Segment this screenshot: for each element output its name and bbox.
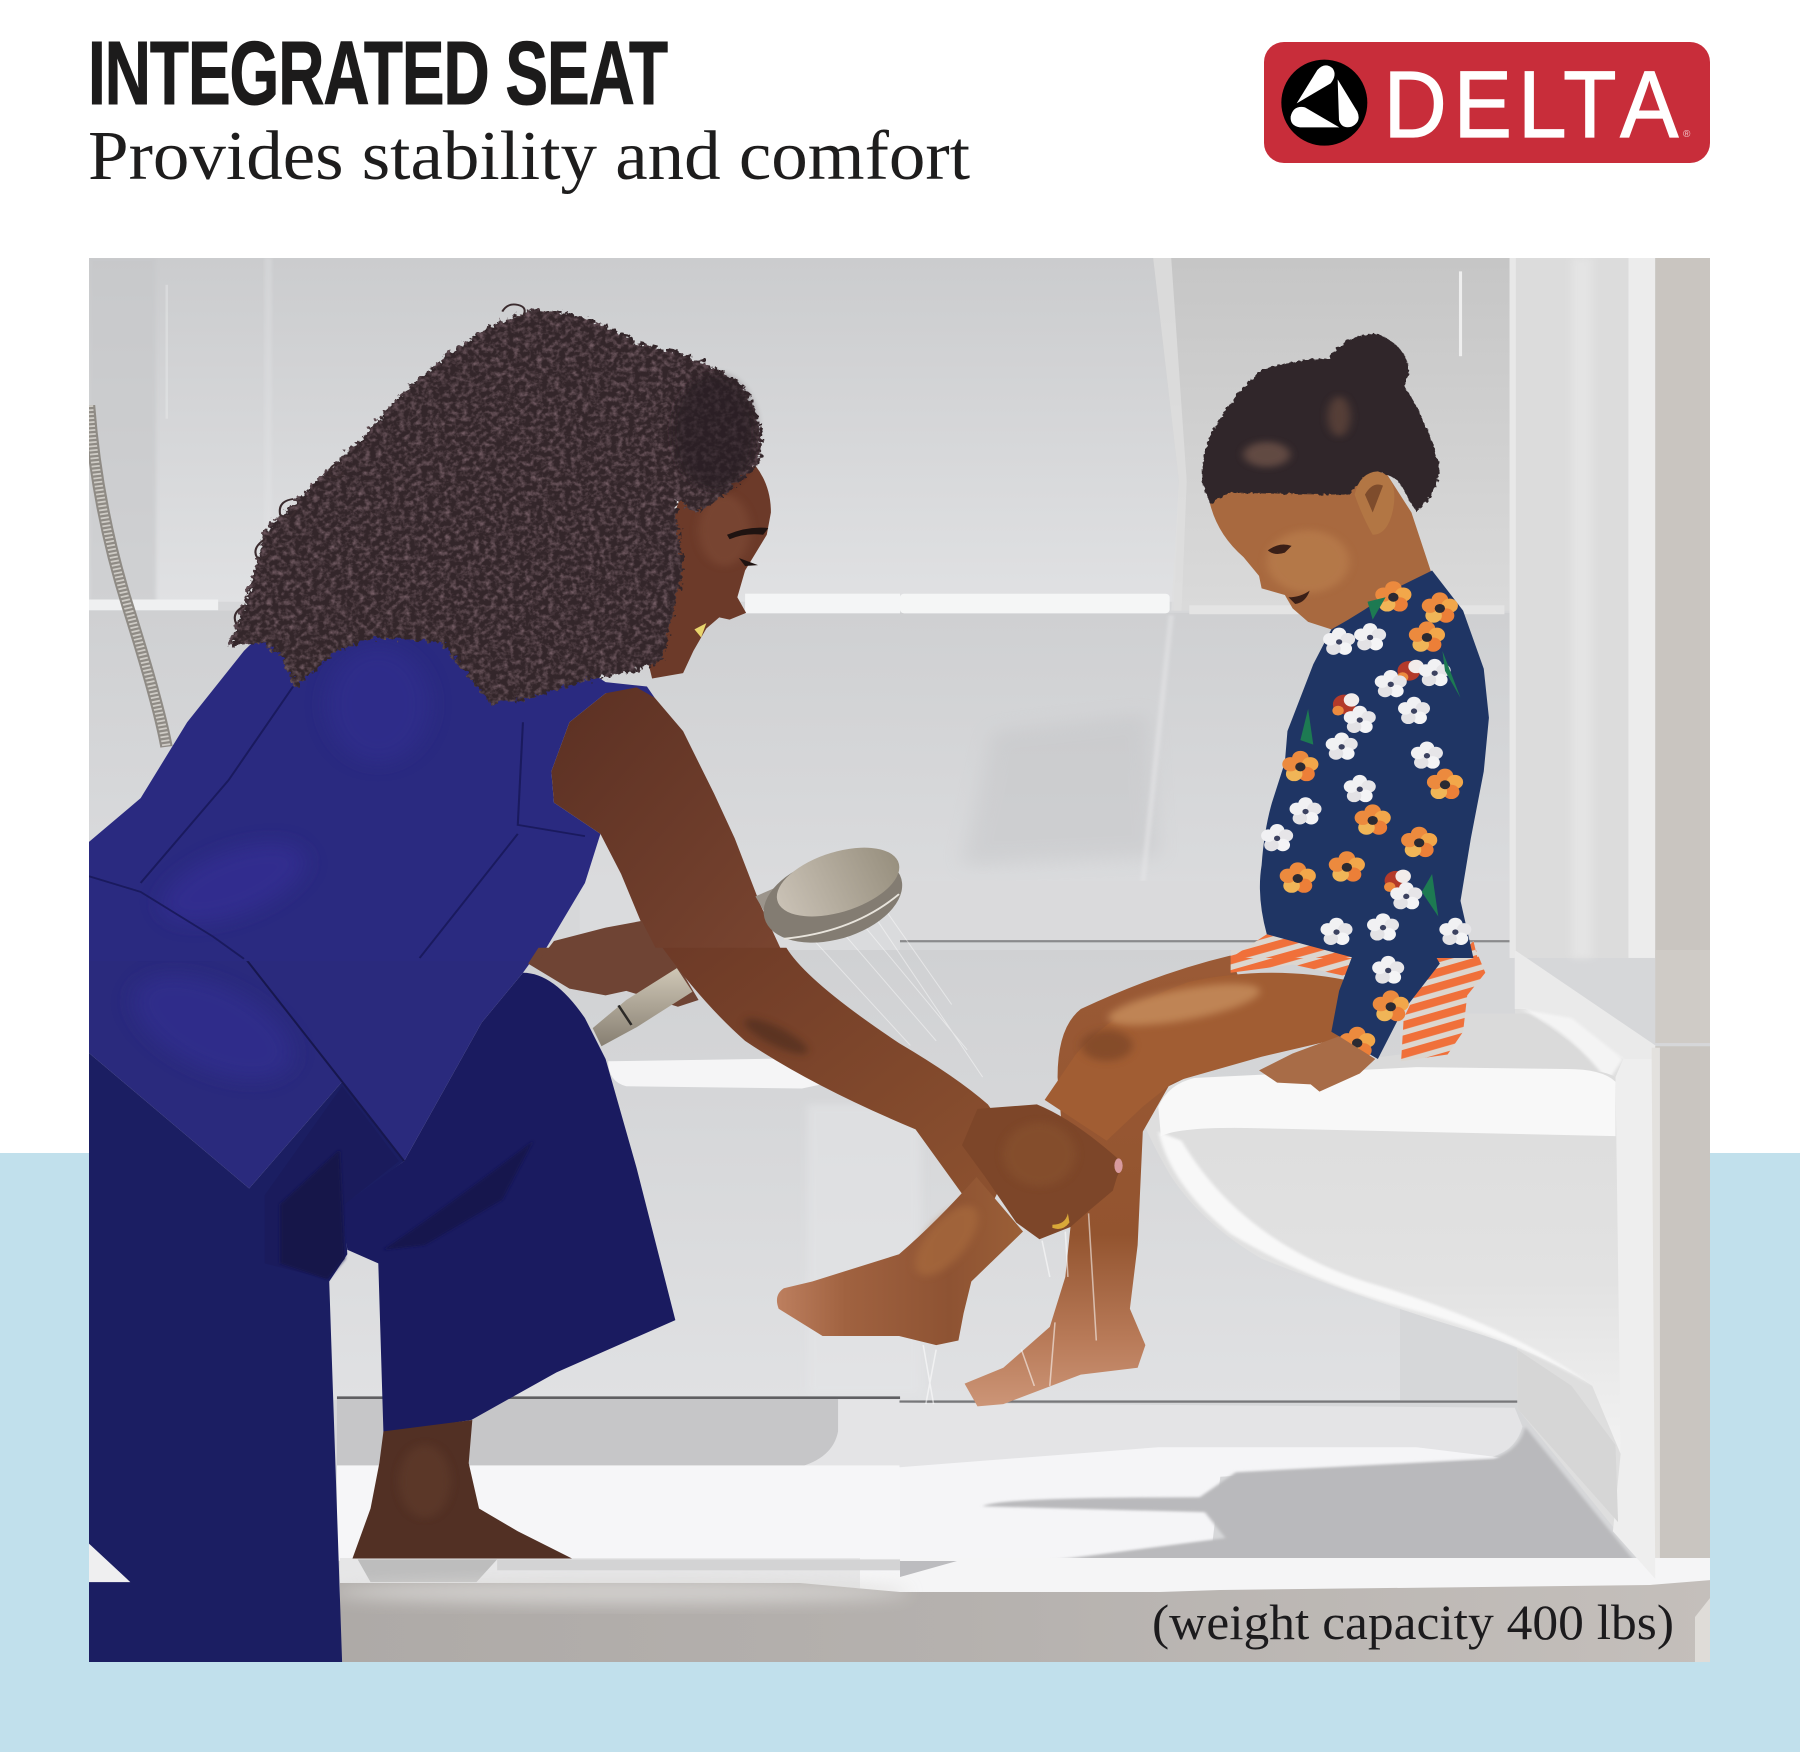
woman's trousers and top [88, 615, 675, 1663]
tub corner trim [1695, 1598, 1710, 1662]
logo icon: black circle with three white drops [1281, 60, 1367, 146]
child's raised leg and foot [777, 1177, 1023, 1345]
woman's face [637, 466, 771, 679]
shower wall background [89, 258, 1710, 1662]
top: upper panel [88, 615, 655, 961]
shower handle [593, 968, 692, 1046]
woman's arm [528, 687, 1019, 1222]
child's shorts [1231, 950, 1485, 1061]
nail [1114, 1158, 1123, 1173]
tub front face [340, 1580, 1712, 1664]
lower wall backdrop [300, 950, 1400, 1400]
woman's curly hair [228, 304, 762, 704]
logo: Delta [1264, 42, 1710, 163]
child's eye and mouth [1268, 544, 1310, 604]
shower hose [89, 405, 166, 747]
hair and bun [1202, 334, 1440, 512]
child's sleeve and hand [1259, 950, 1440, 1092]
seat body [1400, 1072, 1620, 1453]
seat top surface [1262, 1014, 1608, 1073]
subheading: Provides stability and comfort [88, 118, 971, 195]
woman's hand holding child's leg [962, 1104, 1123, 1239]
heading: Integrated Seat: INTEGRATED SEAT [88, 22, 668, 124]
logo red badge [1264, 42, 1710, 163]
water droplets falling from feet and hand [923, 1213, 1096, 1404]
child's far leg [965, 955, 1262, 1406]
top: lower panel [88, 948, 541, 1188]
ear [1355, 471, 1394, 535]
tub front face glow [330, 1580, 910, 1604]
child [965, 334, 1489, 1406]
woman [88, 304, 1123, 1663]
logo wordmark: DELTA [1384, 52, 1679, 158]
floor, shadow and right wall [899, 950, 1710, 1580]
child's floral rash guard [1260, 570, 1489, 958]
integrated shower seat [1138, 1009, 1655, 1579]
trousers: kneeling leg [88, 1052, 404, 1663]
lower wall, alcove ledge and floor at left [337, 1057, 921, 1561]
ring [1052, 1213, 1069, 1229]
light blue band [0, 1153, 1800, 1752]
hand shower head [748, 834, 917, 959]
seat rim highlight [1158, 1067, 1615, 1136]
caption: weight capacity: (weight capacity 400 lbs) [1152, 1594, 1674, 1650]
face and neck [1210, 472, 1432, 629]
registered mark: ® [1683, 129, 1691, 140]
water spray [816, 913, 983, 1078]
seat side panel [1613, 1059, 1655, 1579]
tub front rim [340, 1558, 1710, 1592]
upper arm [551, 687, 786, 961]
child's near leg [1045, 973, 1355, 1141]
forearm [662, 948, 1019, 1222]
photo: woman rinsing child's feet on shower seat [88, 258, 1712, 1664]
child's head [1202, 334, 1440, 629]
woman's standing leg [352, 1420, 572, 1558]
trousers: front leg [342, 973, 675, 1434]
hand gripping shower handle [528, 948, 699, 1007]
eye, brow and teeth [727, 528, 768, 566]
